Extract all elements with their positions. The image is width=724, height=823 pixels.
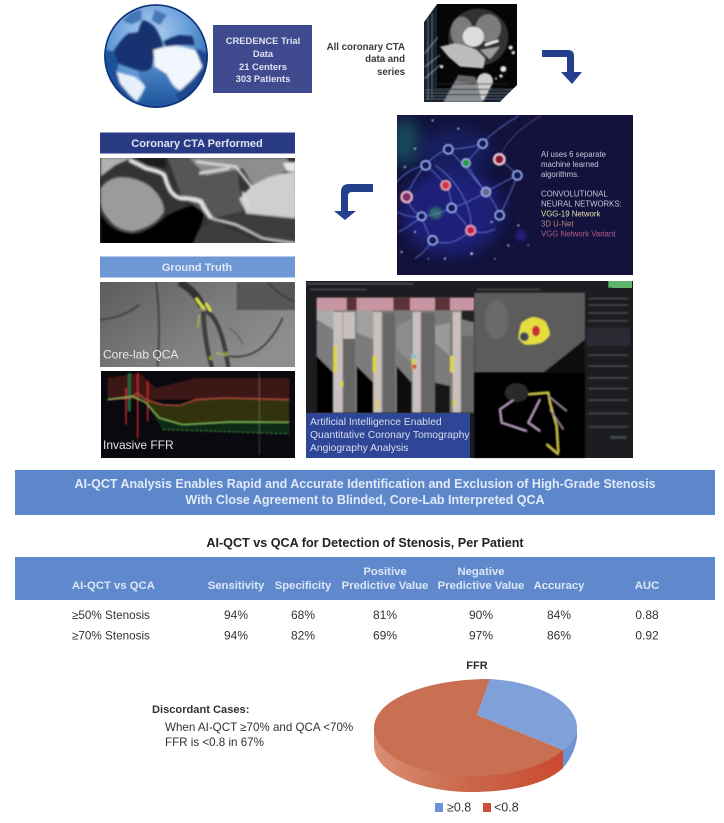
AI-QCT caption box: Quantitative Coronary Tomography <box>310 430 470 441</box>
row: 70% stenosis: 69% <box>373 628 397 642</box>
image: coronary CTA <box>100 158 296 245</box>
heading: Ground Truth: Ground Truth <box>162 262 232 274</box>
text: trial details: CREDENCE Trial <box>226 35 300 46</box>
image: CT slice stack <box>424 4 517 102</box>
heading: table title: AI-QCT vs QCA for Detection of Stenosis, Per Patient <box>206 536 524 550</box>
row: 50% stenosis: 0.88 <box>635 608 659 622</box>
icon: globe <box>104 4 210 110</box>
AI description text: AI uses 6 separate <box>541 150 606 159</box>
arrow: down to AI <box>542 50 582 84</box>
text: all coronary CTA: data and <box>365 54 405 65</box>
row: 50% stenosis: ≥50% Stenosis <box>72 609 150 622</box>
banner: key finding: With Close Agreement to Blinded, Core-Lab Interpreted QCA <box>185 493 545 507</box>
table header: Positive <box>363 566 407 578</box>
table header: Predictive Value <box>342 580 428 592</box>
AI description text: VGG-19 Network <box>541 210 600 218</box>
AI description text: NEURAL NETWORKS: <box>541 200 622 208</box>
AI description text: algorithms. <box>541 170 579 179</box>
AI-QCT caption box: Angiography Analysis <box>310 443 408 454</box>
row: 70% stenosis: 0.92 <box>635 628 659 642</box>
AI description text: 3D U-Net <box>541 220 574 228</box>
text: discordant cases: Discordant Cases: <box>152 704 249 716</box>
row: 70% stenosis: 94% <box>224 628 248 642</box>
heading: FFR: FFR <box>466 660 488 672</box>
AI-QCT caption box <box>306 413 470 458</box>
text: trial details: 21 Centers <box>239 61 287 72</box>
table header: Specificity <box>275 580 332 592</box>
row: 70% stenosis: 86% <box>547 628 571 642</box>
table header: Predictive Value <box>438 580 524 592</box>
heading: Ground Truth <box>100 256 295 278</box>
row: 50% stenosis: 81% <box>373 608 397 622</box>
heading: Coronary CTA Performed <box>100 132 295 154</box>
coronary tree view <box>474 373 585 458</box>
row: 50% stenosis <box>72 608 659 622</box>
slice: less than 0.8 <box>374 679 563 776</box>
chart: FFR pie <box>374 679 577 792</box>
table header <box>15 557 715 600</box>
legend: <0.8 <box>494 800 519 814</box>
AI description text: machine learned <box>541 160 599 169</box>
panel: CREDENCE trial data <box>213 25 312 93</box>
legend: ≥0.8 <box>447 800 471 814</box>
heading: Coronary CTA Performed: Coronary CTA Performed <box>131 138 263 150</box>
table header: Sensitivity <box>208 580 265 592</box>
text: trial details: Data <box>253 48 274 59</box>
row: 70% stenosis: 97% <box>469 628 493 642</box>
legend <box>435 800 519 814</box>
network nodes <box>417 139 522 245</box>
side panel <box>587 298 630 439</box>
network lines <box>397 115 542 259</box>
AI description text: CONVOLUTIONAL <box>541 190 608 198</box>
banner: key finding <box>15 470 715 515</box>
AI description text: VGG Network Variant <box>541 230 616 238</box>
row: 50% stenosis: 84% <box>547 608 571 622</box>
text: all coronary CTA: All coronary CTA <box>327 42 405 53</box>
arrow: from AI to CTA <box>334 184 373 220</box>
image: AI neural network <box>390 115 633 275</box>
table header: Accuracy <box>534 580 585 592</box>
row: 70% stenosis: 82% <box>291 628 315 642</box>
label: Core-lab QCA <box>103 348 178 362</box>
cross-section view <box>474 293 585 373</box>
AI-QCT caption box: Artificial Intelligence Enabled <box>310 417 442 428</box>
table header: AI-QCT vs QCA <box>72 580 155 592</box>
image: core-lab QCA <box>100 282 295 367</box>
text: all coronary CTA: series <box>377 67 405 78</box>
row: 50% stenosis: 94% <box>224 608 248 622</box>
table header: Negative <box>457 566 505 578</box>
slice: at least 0.8 <box>477 679 577 750</box>
text: discordant cases <box>152 704 353 749</box>
text: trial details: 303 Patients <box>236 73 290 84</box>
row: 70% stenosis <box>72 628 659 642</box>
AI description text <box>541 150 622 238</box>
text: discordant cases: When AI-QCT ≥70% and QCA <70% <box>165 721 353 734</box>
chart: invasive FFR trace <box>101 371 295 458</box>
image: AI-QCT software screen <box>306 281 633 458</box>
table header: AUC <box>635 580 659 592</box>
row: 50% stenosis: 90% <box>469 608 493 622</box>
banner: key finding: AI-QCT Analysis Enables Rapid and Accurate Identification and Exclusion of High-Grade Stenosis <box>74 477 656 491</box>
row: 70% stenosis: ≥70% Stenosis <box>72 630 150 642</box>
row: 50% stenosis: 68% <box>291 608 315 622</box>
curved MPR views <box>317 298 474 413</box>
table: detection performance <box>15 557 715 642</box>
text: discordant cases: FFR is <0.8 in 67% <box>165 736 264 749</box>
label: Invasive FFR <box>103 438 174 452</box>
